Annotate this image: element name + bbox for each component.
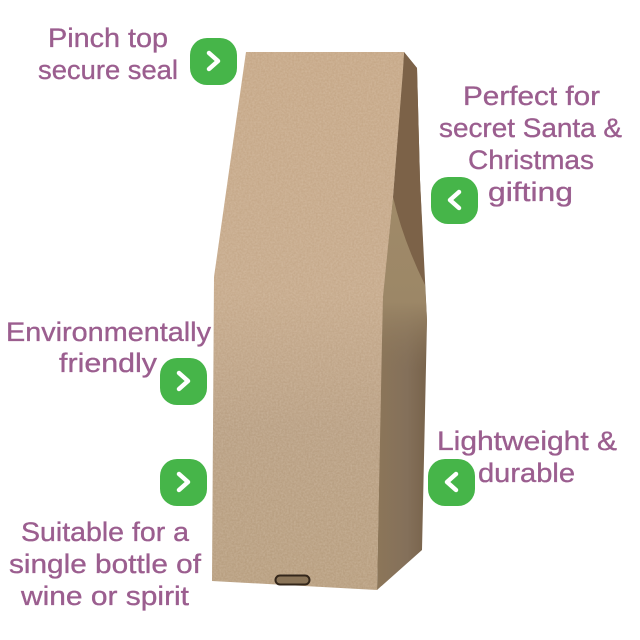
label: lightweight [437, 426, 617, 488]
label: secret santa: Perfect for [463, 81, 600, 111]
callout: pinch top [38, 23, 237, 85]
label: lightweight: Lightweight & [437, 426, 617, 456]
icon: left chevron [428, 459, 475, 506]
callout: environmentally friendly [6, 317, 212, 405]
icon: right chevron [160, 459, 207, 506]
box carry slot [276, 576, 310, 584]
box upper side fold [381, 197, 427, 370]
product: cardboard wine box [212, 52, 427, 590]
label: environmentally friendly: friendly [59, 348, 158, 378]
label: environmentally friendly [6, 317, 212, 378]
icon: left chevron [431, 177, 478, 224]
label: pinch top: Pinch top [48, 23, 168, 53]
label: secret santa [439, 81, 622, 207]
callout: lightweight [428, 426, 617, 506]
icon: right chevron [190, 38, 237, 85]
callout: secret santa [431, 81, 622, 224]
icon: right chevron [160, 358, 207, 405]
label: secret santa: Christmas [468, 145, 594, 175]
label: pinch top: secure seal [38, 55, 178, 85]
label: single bottle: wine or spirit [20, 581, 190, 611]
label: single bottle: Suitable for a [21, 517, 190, 547]
label: secret santa: secret Santa & [439, 113, 622, 143]
box front panel [212, 52, 404, 590]
label: pinch top [38, 23, 178, 85]
label: environmentally friendly: Environmentally [6, 317, 212, 347]
label: single bottle [9, 517, 202, 611]
box side panel [377, 52, 427, 590]
box upper side flap [393, 52, 425, 290]
label: lightweight: durable [478, 458, 575, 488]
label: secret santa: gifting [488, 177, 573, 207]
box front panel grain [212, 52, 404, 590]
callout: single bottle [9, 459, 207, 611]
label: single bottle: single bottle of [9, 549, 202, 579]
